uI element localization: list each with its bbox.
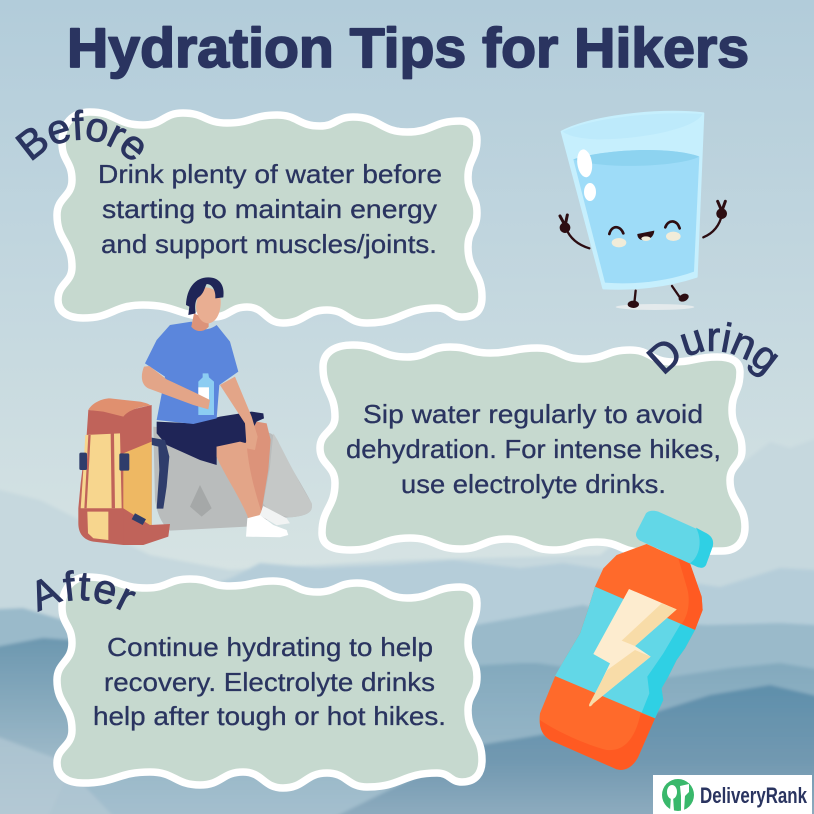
water [573, 150, 699, 283]
near arm [142, 366, 210, 409]
after body text: help after tough or hot hikes. [93, 701, 446, 731]
before body text: starting to maintain energy [102, 194, 437, 224]
hands and feet [560, 222, 570, 233]
arms and legs [560, 201, 725, 303]
backpack straps [152, 438, 169, 509]
logo: DeliveryRank [653, 775, 812, 814]
after body text: Continue hydrating to help [107, 632, 433, 662]
during body text: use electrolyte drinks. [401, 469, 666, 499]
after body text [93, 632, 446, 731]
after panel shape [57, 577, 482, 788]
face [609, 221, 680, 234]
rim [563, 113, 702, 139]
backpack lower pocket [87, 512, 108, 540]
after body text: recovery. Electrolyte drinks [104, 667, 435, 697]
blue label band [555, 587, 695, 718]
backpack side pocket [123, 442, 152, 533]
face [196, 287, 221, 323]
logo background [653, 775, 812, 814]
during body text: dehydration. For intense hikes, [346, 434, 721, 464]
far leg [245, 422, 271, 511]
panel: before [57, 112, 482, 323]
water bottle [198, 373, 214, 415]
near shoe [246, 515, 288, 537]
rock [153, 427, 312, 531]
highlights [575, 148, 594, 178]
water surface [573, 150, 699, 166]
shirt [145, 322, 238, 424]
backpack body [78, 405, 152, 545]
shorts [157, 412, 264, 465]
far arm [220, 377, 258, 450]
darker bottle base [540, 713, 655, 770]
icon: happy water glass [560, 112, 727, 310]
during body text: Sip water regularly to avoid [363, 399, 703, 429]
label: after: After [36, 570, 136, 612]
darker bottle side top [678, 558, 703, 630]
bottle cap [636, 511, 713, 568]
icon: electrolyte sports drink bottle [540, 511, 713, 770]
panel: after [57, 577, 482, 788]
panel: during [320, 345, 745, 552]
before body text: and support muscles/joints. [101, 229, 437, 259]
before panel shape [57, 112, 482, 323]
backpack top [88, 398, 151, 417]
glass body [562, 112, 703, 289]
backpack buckles [79, 453, 87, 470]
label: during: During [646, 322, 778, 378]
neck [191, 313, 209, 331]
title: Hydration Tips for Hikers [67, 16, 749, 79]
logo icon [662, 779, 694, 811]
lightning bolt [589, 589, 677, 706]
backpack front [81, 433, 122, 508]
before body text [98, 159, 442, 259]
bottle body [540, 544, 703, 770]
before body text: Drink plenty of water before [98, 159, 442, 189]
label shading [642, 624, 695, 718]
hair [186, 277, 224, 315]
near leg [217, 442, 261, 521]
during body text [346, 399, 721, 499]
far shoe [259, 506, 290, 525]
label: before: Before [15, 110, 144, 161]
glass shadow [616, 304, 694, 310]
illustration: hiker sitting on a rock with backpack [78, 277, 312, 545]
during panel shape [320, 345, 745, 552]
